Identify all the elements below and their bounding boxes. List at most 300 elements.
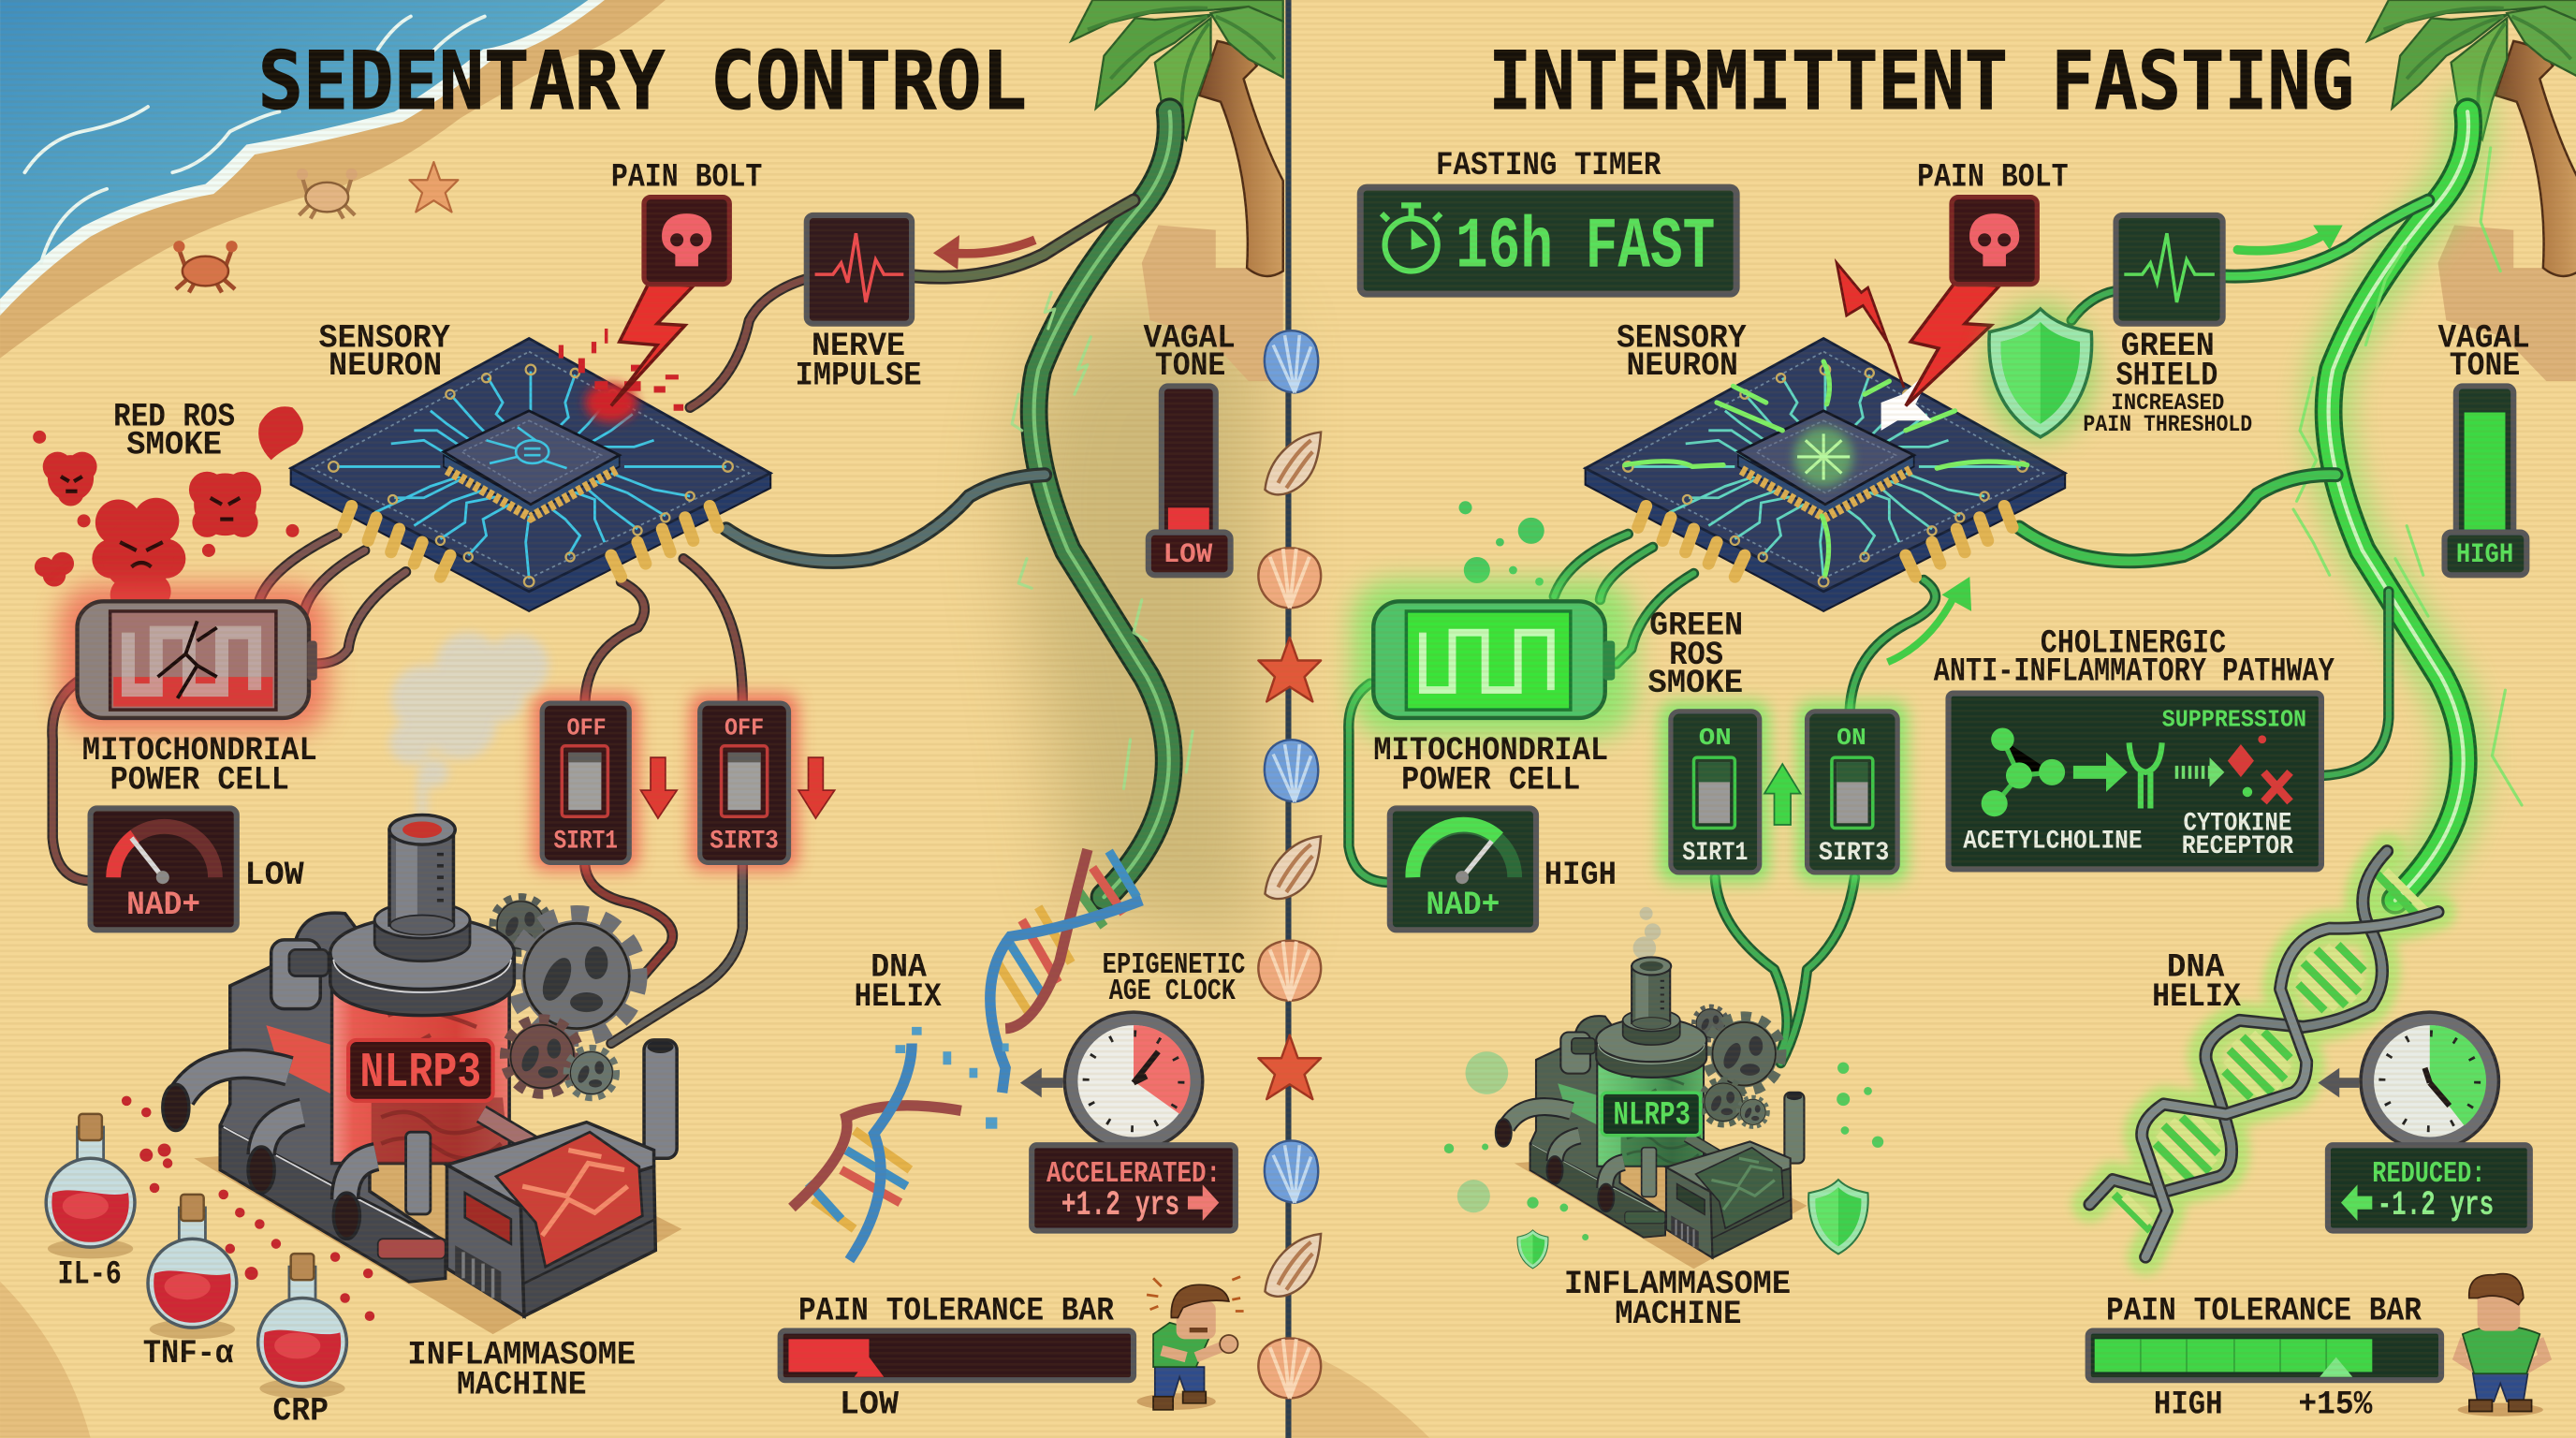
damage splatter: [559, 329, 683, 422]
low arc: [113, 836, 135, 877]
label: PAIN TOLERANCE BAR: [2106, 1292, 2422, 1329]
plate: [2328, 1145, 2530, 1231]
upper strand A: [1005, 849, 1088, 1029]
readout: [2445, 533, 2526, 575]
arrow: [2237, 233, 2326, 251]
accelerated: ACCELERATED:: [1046, 1158, 1221, 1191]
core G: [1349, 683, 1386, 882]
core: [1034, 111, 1171, 897]
label: SENSORY: [1617, 319, 1747, 357]
stopwatch: [1382, 205, 1441, 271]
label: SMOKE: [126, 426, 222, 463]
wires, left panel: [52, 200, 1134, 1043]
cytokine droplets: [122, 1096, 374, 1321]
level: LOW: [840, 1386, 900, 1423]
wire: SIRT1 to machine: [585, 866, 672, 983]
arrow head: [1020, 1068, 1042, 1097]
wire: chip to vagus core: [726, 475, 1045, 562]
cytokine receptor: RECEPTOR: [2182, 832, 2293, 861]
cytokine receptor: CYTOKINE: [2183, 809, 2291, 838]
crab: pale: [297, 169, 358, 218]
crack: [158, 621, 217, 698]
wire: chip to SIRT3 core: [683, 559, 742, 703]
low label: LOW: [245, 857, 305, 894]
down arrow 1: [641, 757, 677, 818]
wire: battery to NAD core: [52, 679, 89, 881]
panel: [1360, 187, 1736, 294]
wire: SIRT3 to machine: [611, 866, 742, 1043]
nerve shadow band, left panel: [1013, 312, 1265, 953]
wire I: [2223, 200, 2428, 276]
shirt: [2463, 1326, 2539, 1373]
fasting timer: [1360, 147, 1736, 294]
NLRP3 plate: [1602, 1093, 1701, 1136]
panel: [1949, 694, 2321, 869]
pivot: [1456, 871, 1469, 884]
wire H: [2071, 291, 2116, 320]
plate: [1032, 1145, 1236, 1231]
terminal: [307, 640, 317, 681]
label: MITOCHONDRIAL: [1373, 732, 1608, 770]
wire G: [1349, 683, 1386, 882]
palm-side sand patch, right: [2438, 225, 2576, 381]
shell 10: [1265, 1234, 1321, 1297]
label: AGE CLOCK: [1109, 976, 1236, 1008]
mitochondrial power cell, left: [59, 585, 329, 799]
chip arrow head: [1942, 577, 1971, 611]
bezel: [1064, 1012, 1203, 1151]
label: [113, 399, 235, 463]
pivot: [156, 871, 169, 884]
lower strand A: [792, 1106, 961, 1208]
core E: [1715, 877, 1787, 1060]
monitor: [807, 215, 912, 324]
dissolved blobs: [1457, 1051, 1508, 1212]
label: [2083, 328, 2252, 438]
value: LOW: [1164, 538, 1212, 570]
dots: [1459, 501, 1544, 586]
label: DNA: [871, 948, 928, 986]
inflammasome machine, left: [122, 814, 681, 1403]
label: POWER CELL: [110, 761, 289, 799]
character in pain: [1137, 1277, 1244, 1410]
label: EPIGENETIC: [1103, 949, 1245, 982]
arrow: [1038, 1080, 1063, 1086]
wire E: [1715, 877, 1787, 1060]
label: MITOCHONDRIAL: [82, 732, 317, 770]
wire: chip to battery A core: [259, 534, 337, 600]
high label: HIGH: [1544, 857, 1617, 894]
pain tolerance bar, right: [2088, 1292, 2441, 1423]
label: RED ROS: [113, 399, 235, 436]
label: sensory neuron: [319, 319, 450, 385]
arrow head: [2318, 1068, 2339, 1097]
red wedge: [1134, 1025, 1191, 1114]
wire cores, right panel: [1349, 200, 2428, 1064]
value: NAD+: [1426, 887, 1500, 924]
receptor: [2130, 742, 2162, 808]
glow: [2329, 111, 2468, 901]
label: PAIN TOLERANCE BAR: [798, 1292, 1115, 1329]
casing: [1373, 601, 1605, 718]
label: INCREASED: [2111, 391, 2224, 417]
wire A: [1554, 534, 1628, 596]
outline: [2329, 111, 2468, 901]
core J: [2019, 475, 2336, 561]
chip arrow: [1888, 594, 1955, 662]
wire: battery to NAD: [52, 679, 89, 881]
core C: [1617, 574, 1693, 664]
wire: chip to battery A: [259, 534, 337, 600]
switch SIRT1: SIRT1: [554, 828, 618, 857]
panel: [1390, 808, 1536, 930]
ticks: [1086, 1034, 1181, 1129]
label: GREEN: [2121, 328, 2215, 365]
high arc: [1412, 825, 1499, 877]
cholinergic anti-inflammatory pathway: [1934, 625, 2334, 869]
wire: chip to battery C core: [315, 572, 406, 664]
potion TNF-alpha: [148, 1195, 237, 1339]
label: PAIN BOLT: [611, 158, 762, 196]
needle: [1462, 842, 1492, 877]
label: sensory neuron: NEURON: [329, 347, 442, 385]
wire F: [1781, 877, 1854, 1064]
NLRP3 text: NLRP3: [1613, 1096, 1690, 1134]
up arrow: [1764, 764, 1801, 825]
glow: [59, 585, 329, 733]
strand A core: [2089, 851, 2387, 1204]
label: NEURON: [1627, 347, 1738, 385]
title: sedentary control: SEDENTARY CONTROL: [258, 35, 1027, 128]
label: PAIN THRESHOLD: [2083, 413, 2252, 438]
label: [1144, 319, 1236, 385]
palm tree, left panel: [1071, 0, 1283, 276]
label: VAGAL: [2438, 319, 2530, 357]
vagus nerve trunk, left: [1034, 111, 1171, 897]
confident character: [2458, 1274, 2545, 1416]
filament: [1423, 633, 1551, 690]
switch SIRT3: OFF: [724, 713, 764, 741]
label: ROS: [1669, 637, 1723, 674]
shoes: [1153, 1392, 1206, 1410]
wires, right panel: [1349, 200, 2428, 1064]
label: SHIELD: [2116, 358, 2217, 395]
shell 3: [1258, 548, 1321, 608]
arc: [113, 827, 215, 877]
vagal tone gauge, right: [2438, 319, 2530, 575]
label: INFLAMMASOME: [407, 1337, 636, 1374]
label: [855, 948, 943, 1016]
label: TONE: [2450, 347, 2520, 385]
vagus nerve trunk, right: [2293, 111, 2522, 901]
wire: SIRT1 to machine core: [585, 866, 672, 983]
shell 6: [1265, 836, 1321, 899]
small shield: [1517, 1230, 1548, 1269]
shell 1: [1265, 330, 1318, 392]
wire: chip to SIRT3: [683, 559, 742, 703]
lower rungs: [809, 1130, 910, 1229]
marker: [855, 1357, 884, 1377]
cytokine potions: [46, 1114, 346, 1430]
label CRP: CRP: [272, 1392, 329, 1430]
NLRP3 plate: [348, 1040, 493, 1101]
strand A: [2089, 851, 2387, 1204]
shell 4: [1258, 638, 1321, 701]
red ROS smoke: [33, 399, 303, 661]
clouds: [33, 406, 303, 661]
bolt: [611, 283, 694, 405]
pain bolt, right: [1837, 158, 2069, 405]
wire: chip to impulse: [690, 279, 805, 407]
fill: [2095, 1339, 2372, 1372]
chamber: [110, 611, 276, 710]
arrow head: [933, 235, 959, 270]
sparks: [2293, 148, 2522, 805]
label: GREEN: [1649, 607, 1743, 644]
wire: chip to SIRT1 core: [585, 581, 644, 703]
fill: [788, 1339, 869, 1372]
core A: [1554, 534, 1628, 596]
glow: [533, 694, 798, 871]
tube: [2456, 386, 2513, 537]
hair: [2469, 1274, 2524, 1304]
cytokines: [2228, 735, 2291, 801]
epigenetic age clock, right: [2318, 1012, 2530, 1231]
lower strand B: [849, 1043, 912, 1260]
monitor: [2116, 215, 2223, 324]
arm: [1162, 1344, 1229, 1357]
NAD+ gauge, left: [91, 808, 305, 930]
core D: [1850, 580, 1936, 710]
ground shadow: [1137, 1393, 1216, 1410]
ground shadow: [2458, 1403, 2543, 1416]
label: MACHINE: [457, 1366, 587, 1403]
switch SIRT1: SIRT1: [1682, 839, 1748, 868]
potion CRP: [258, 1254, 346, 1399]
switch SIRT1: [1671, 712, 1760, 873]
strand B core: [2142, 912, 2438, 1257]
filament: [128, 633, 255, 690]
neon traces: [1625, 361, 2027, 575]
core star: [1797, 433, 1850, 479]
label: sensory neuron: SENSORY: [319, 319, 450, 357]
potion IL-6: [46, 1114, 135, 1258]
reduced: REDUCED:: [2372, 1158, 2485, 1191]
neon glow: [1794, 427, 1853, 486]
level: HIGH: [2154, 1386, 2223, 1423]
highlight: [1034, 111, 1171, 897]
molecule: [1982, 727, 2065, 816]
terminal: [1603, 640, 1615, 681]
label: VAGAL: [1144, 319, 1236, 357]
main bolt: [1906, 283, 1999, 405]
wire: SIRT3 to machine core: [611, 866, 742, 1043]
label: MACHINE: [1615, 1296, 1741, 1333]
switch SIRT3: [1808, 712, 1897, 873]
column of shells: [1258, 330, 1321, 1399]
arms: [2459, 1339, 2545, 1369]
label: POWER CELL: [1401, 761, 1580, 799]
label: [795, 328, 922, 395]
value: NAD+: [126, 887, 200, 924]
hands: [2424, 1068, 2450, 1106]
fist: [1220, 1335, 1237, 1353]
shell 9: [1265, 1140, 1318, 1203]
label: HELIX: [855, 978, 943, 1016]
label: [1647, 607, 1743, 702]
wire J: [2019, 475, 2336, 561]
readout: [1149, 533, 1231, 575]
track: [2088, 1331, 2441, 1380]
ecg trace: [2124, 233, 2215, 302]
label: [1373, 732, 1608, 799]
darker sand patches: [0, 1282, 1429, 1438]
moustache: [1190, 1328, 1208, 1332]
skull: [1969, 213, 2019, 266]
switch SIRT3: [700, 703, 788, 862]
SIRT switches, off: [533, 694, 835, 871]
panel: [91, 808, 237, 930]
arrow head: [2313, 225, 2343, 250]
label: [82, 732, 317, 799]
switch SIRT3: ON: [1837, 724, 1866, 752]
starfish: [409, 162, 458, 212]
wire: chip to vagus: [726, 475, 1045, 562]
jeans: [1155, 1367, 1204, 1399]
big shield: [1808, 1180, 1868, 1254]
heading: ANTI-INFLAMMATORY PATHWAY: [1934, 653, 2334, 691]
needle: [131, 838, 163, 877]
fill: [2465, 413, 2505, 531]
impact spark: [1881, 365, 1935, 431]
mitochondrial power cell, right: [1352, 580, 1634, 799]
label: [407, 1337, 636, 1403]
deflected bolt: [1837, 263, 1904, 388]
center divider: [1285, 0, 1292, 1438]
label: [2438, 319, 2530, 385]
core I: [2223, 200, 2428, 276]
palm tree, right panel: [2367, 0, 2576, 276]
angry faces: [61, 477, 240, 566]
wire: chip to battery C: [315, 572, 406, 664]
skull box: [1952, 198, 2037, 285]
shirt: [1153, 1323, 1211, 1367]
inflammasome machine, right: [1444, 957, 1883, 1333]
green dots: [1444, 1063, 1883, 1240]
shell 2: [1265, 433, 1321, 494]
sensory neuron chip, left: [291, 329, 770, 611]
label IL-6: IL-6: [57, 1256, 122, 1294]
upper rungs: [996, 851, 1137, 1012]
face: [2374, 1025, 2485, 1137]
wire B: [1600, 547, 1653, 600]
label: HELIX: [2152, 978, 2242, 1016]
highlight: [2329, 111, 2468, 901]
ticks: [2382, 1034, 2478, 1129]
label: [1103, 949, 1245, 1008]
shell 11: [1258, 1338, 1321, 1399]
wire: chip to SIRT1: [585, 581, 644, 703]
casing: [78, 601, 309, 718]
neuron glyph: [487, 427, 567, 468]
upper strand B: [990, 901, 1142, 1093]
shell 7: [1258, 941, 1321, 1001]
arrow: [953, 240, 1035, 254]
cytokine receptor: [2182, 809, 2293, 861]
label: [1564, 1266, 1791, 1333]
wire D: [1850, 580, 1936, 710]
dotted arrow: [2175, 769, 2211, 776]
faint smoke, right machine: [1633, 907, 1661, 960]
sparks along left nerve: [1012, 292, 1193, 788]
value arrow: [2341, 1184, 2372, 1221]
hands: [1134, 1051, 1158, 1083]
label: IMPULSE: [795, 358, 922, 395]
DNA helix, healthy: [2089, 851, 2438, 1257]
label: SMOKE: [1647, 665, 1743, 702]
pain tolerance bar, left: [781, 1292, 1134, 1423]
arrow: [2336, 1080, 2359, 1086]
fill: [1168, 507, 1209, 531]
arrow: [2073, 753, 2128, 792]
tube: [1162, 386, 1216, 537]
core F: [1781, 877, 1854, 1064]
glow: [1984, 302, 2096, 440]
label: FASTING TIMER: [1436, 147, 1661, 184]
segments: [2141, 1339, 2326, 1372]
wire: chip to battery B: [302, 550, 365, 621]
dotted arrow head: [2210, 757, 2224, 787]
glow: [1660, 701, 1908, 882]
ecg trace: [815, 233, 903, 302]
wire: impulse to vagus core: [912, 200, 1134, 277]
nerve impulse monitor: [795, 215, 1035, 395]
shield: [1989, 309, 2092, 437]
head: [2478, 1284, 2520, 1331]
label: NERVE: [812, 328, 905, 365]
wire K: [2323, 592, 2389, 775]
shoes: [2469, 1400, 2532, 1412]
acetylcholine: ACETYLCHOLINE: [1963, 828, 2143, 857]
green shield: [1984, 215, 2343, 440]
crabs and starfish: [173, 162, 458, 292]
SIRT switches, on: [1660, 577, 1971, 882]
DNA helix, damaged: [792, 849, 1142, 1260]
label: TONE: [1155, 347, 1225, 385]
skull box: [644, 198, 729, 285]
glow: [1352, 580, 1634, 738]
sensory neuron chip, right: [1586, 319, 2065, 611]
suppression: SUPPRESSION: [2162, 706, 2306, 734]
value: -1.2 yrs: [2378, 1186, 2494, 1225]
hair: [1171, 1284, 1229, 1318]
label: DNA: [2167, 948, 2225, 986]
switch SIRT1: ON: [1699, 724, 1732, 752]
wire: chip to impulse core: [690, 279, 805, 407]
track: [781, 1331, 1134, 1380]
core K: [2323, 592, 2389, 775]
shell 8: [1258, 1035, 1321, 1099]
strand B: [2142, 912, 2438, 1257]
wire C: [1617, 574, 1693, 664]
NLRP3 text: NLRP3: [359, 1045, 481, 1101]
value: +1.2 yrs: [1061, 1186, 1179, 1225]
epigenetic age clock, left: [1020, 949, 1245, 1231]
pain bolt, left: [611, 158, 762, 405]
NAD+ gauge, right: [1390, 808, 1617, 930]
chamber: [1406, 611, 1571, 710]
vagal tone gauge, left: [1144, 319, 1236, 575]
